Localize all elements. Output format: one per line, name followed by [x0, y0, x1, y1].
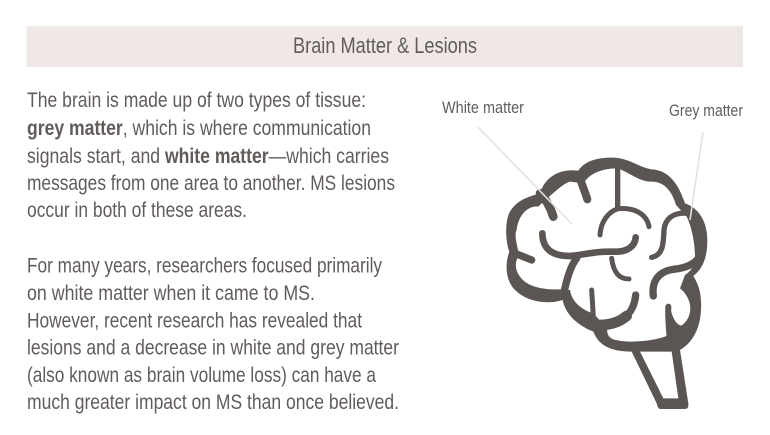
title: Brain Matter & Lesions [293, 33, 477, 58]
brain stem opening [640, 352, 678, 398]
heading band [26, 26, 743, 67]
brain folds [515, 167, 698, 343]
text block: tissue types [27, 88, 395, 222]
text block: tissue types: occur in both of these areas. [27, 198, 247, 222]
text block: research: much greater impact on MS than once believed. [27, 390, 399, 414]
text block: research: lesions and a decrease in white and grey matter [27, 336, 399, 360]
text block: research: (also known as brain volume loss) can have a [27, 363, 376, 387]
text block: research [27, 254, 399, 414]
text block: research: However, recent research has revealed that [27, 308, 362, 332]
label: white matter [442, 98, 572, 224]
leader line: grey matter [690, 132, 703, 220]
text block: tissue types: signals start, and white matter—which carries [27, 144, 389, 168]
label: white matter: White matter [442, 98, 524, 117]
text block: research: For many years, researchers focused primarily [27, 254, 382, 278]
text block: tissue types: grey matter, which is where communication [27, 116, 371, 140]
text block: tissue types: messages from one area to another. MS lesions [27, 171, 395, 195]
brain interior [516, 168, 695, 342]
icon: brain [506, 158, 707, 409]
label: grey matter [669, 101, 743, 220]
text block: tissue types: The brain is made up of two types of tissue: [27, 88, 366, 112]
label: grey matter: Grey matter [669, 101, 743, 120]
brain silhouette [506, 158, 707, 409]
leader line: white matter [478, 127, 572, 224]
text block: research: on white matter when it came to MS. [27, 281, 315, 305]
